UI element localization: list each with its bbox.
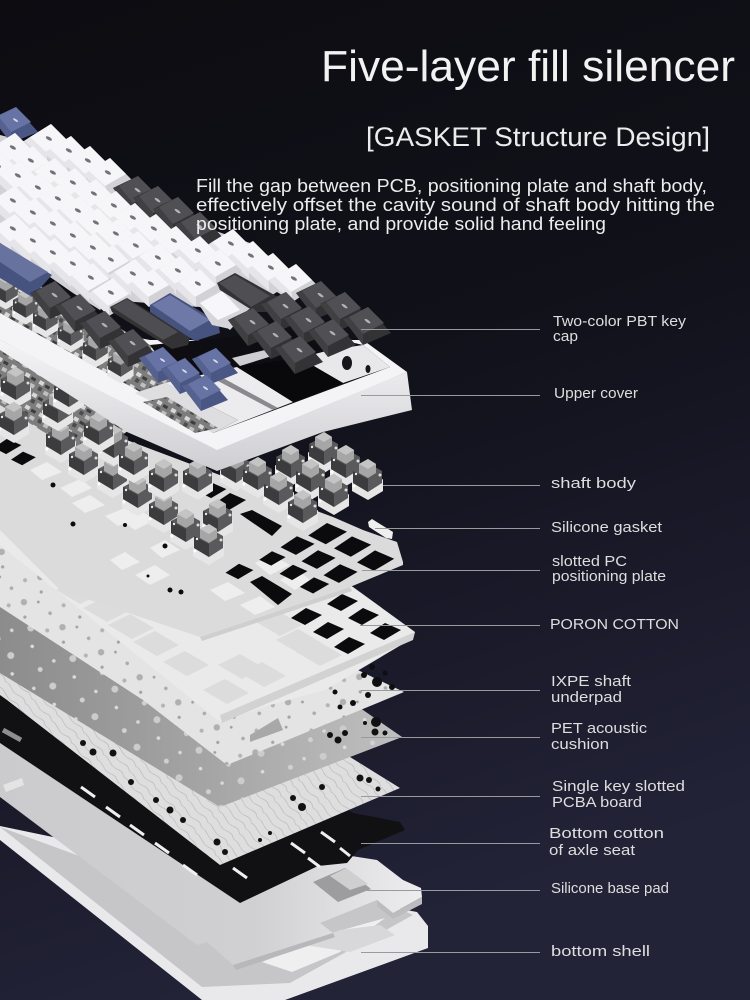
layer: bottom cotton of axle seat — [0, 640, 405, 903]
callout: single key slotted PCBA board — [361, 778, 685, 811]
layer: silicone base pad — [0, 700, 422, 970]
callout: two-color PBT key cap — [361, 313, 687, 345]
callout: single key slotted PCBA board: Single key slotted — [552, 778, 685, 795]
callout: IXPE shaft underpad: IXPE shaft — [551, 673, 632, 690]
callout: slotted PC positioning plate: positioning plate — [552, 568, 666, 585]
layer: single key slotted PCBA board — [0, 590, 400, 865]
switches above front rail — [0, 268, 213, 433]
callout: two-color PBT key cap: cap — [553, 328, 578, 345]
callout: bottom cotton of axle seat: Bottom cotton — [549, 825, 664, 842]
callout: slotted PC positioning plate — [362, 553, 666, 585]
key: backspace dark — [217, 273, 278, 312]
description text: effectively offset the cavity sound of shaft body hitting the — [196, 195, 715, 215]
callout: silicone gasket: Silicone gasket — [551, 519, 663, 536]
key: spacebar dark — [110, 298, 190, 349]
exploded keyboard — [0, 107, 428, 1000]
callout: bottom shell: bottom shell — [551, 943, 650, 960]
callout: PET acoustic cushion: cushion — [551, 736, 609, 753]
key: enter white — [198, 289, 248, 329]
mottled switch field — [0, 335, 135, 448]
keycaps: two-color PBT — [0, 107, 391, 411]
callout: shaft body: shaft body — [551, 475, 637, 492]
description text: Fill the gap between PCB, positioning plate and shaft body, — [196, 176, 707, 196]
callout: PET acoustic cushion: PET acoustic — [551, 720, 648, 737]
layer: PORON cotton — [0, 430, 415, 723]
callout: PORON cotton: PORON COTTON — [550, 616, 679, 633]
callout: IXPE shaft underpad: underpad — [551, 689, 622, 706]
layer: shaft body switches — [0, 335, 383, 565]
key bed — [0, 130, 313, 330]
layer: slotted PC positioning plate — [0, 400, 403, 641]
callout: upper cover: Upper cover — [554, 385, 638, 402]
cover interior — [150, 330, 390, 433]
callout: bottom cotton of axle seat — [361, 825, 664, 859]
layer: upper cover — [0, 268, 412, 471]
callout: IXPE shaft underpad — [361, 673, 632, 706]
callout: silicone base pad: Silicone base pad — [551, 880, 669, 897]
description text: positioning plate, and provide solid hand feeling — [196, 214, 606, 234]
layer: bottom shell — [0, 826, 428, 1000]
description text — [196, 176, 715, 234]
key: left shift blue — [0, 243, 52, 297]
subtitle: [GASKET Structure Design] — [366, 122, 710, 152]
key: blue wide — [150, 293, 220, 341]
layer: IXPE shaft underpad — [0, 470, 404, 765]
callout: two-color PBT key cap: Two-color PBT key — [553, 313, 687, 330]
layer: PET acoustic cushion — [0, 500, 402, 807]
cover top rim — [0, 312, 407, 450]
callout: PET acoustic cushion — [361, 720, 648, 753]
callout: single key slotted PCBA board: PCBA board — [552, 794, 642, 811]
callout: bottom cotton of axle seat: of axle seat — [549, 842, 636, 859]
cover side wall — [0, 340, 412, 471]
icon: silicone gasket — [368, 519, 393, 539]
title: Five-layer fill silencer — [321, 42, 735, 91]
switches inside frame — [0, 275, 134, 384]
callout: slotted PC positioning plate: slotted PC — [552, 553, 627, 570]
